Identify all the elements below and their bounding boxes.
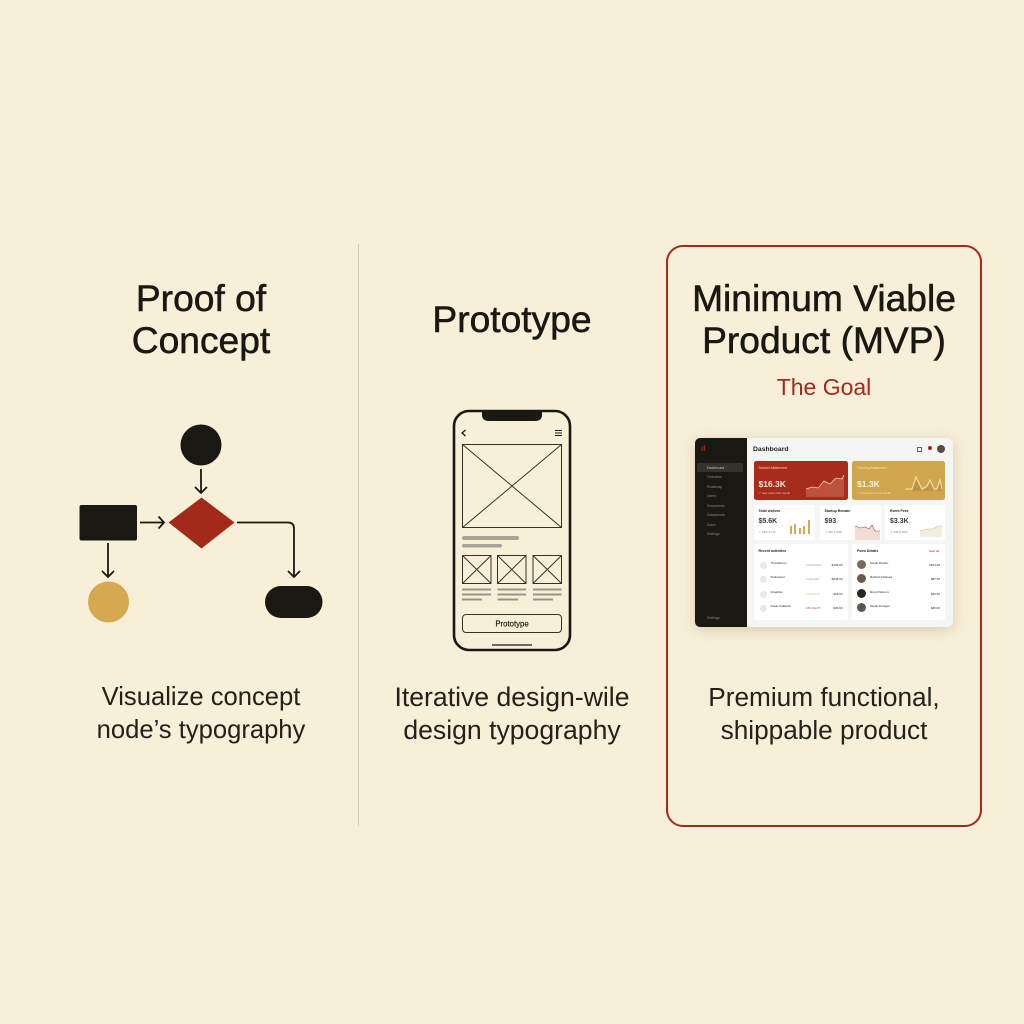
- heading: Prototype: Prototype: [432, 298, 592, 340]
- table: recent activity: Great Indiiana: [770, 604, 791, 608]
- phone button label: Prototype: [495, 620, 529, 628]
- heading: Proof of Concept: Proof of: [136, 277, 266, 319]
- notification dot: [928, 446, 932, 450]
- table: people: Brent Nelson: [870, 590, 889, 594]
- sidebar: Datasheets: [707, 513, 725, 517]
- description: proof of concept: node’s typography: [97, 716, 305, 744]
- gold KPI card: ↗ investments this month: [857, 491, 891, 495]
- table: recent activity: $246.00: [832, 577, 842, 581]
- stat card: event fees: $3.3K: [890, 518, 909, 525]
- dashboard title: Dashboard: [753, 446, 789, 453]
- stat card: total visitors: Total visitors: [758, 509, 780, 513]
- sidebar: Overview: [707, 475, 722, 479]
- table: recent activity: Graphite: [770, 590, 783, 594]
- red KPI card: ↗ new users this month: [758, 491, 790, 495]
- heading: Minimum Viable Product: Product (MVP): [702, 319, 946, 361]
- table: people: View all: [929, 549, 939, 553]
- sidebar: Documents: [707, 504, 725, 508]
- table: people: Sarah Hodges: [870, 604, 890, 608]
- description: prototype: Iterative design-wile: [394, 682, 630, 712]
- sidebar: Settings: [707, 532, 720, 536]
- table: recent activity: $105.00: [832, 563, 842, 567]
- table: recent activity: ▪ PAYOUT: [806, 592, 819, 596]
- stat card: total visitors: [754, 505, 814, 540]
- gold KPI card: Funding Attainment: [857, 466, 887, 470]
- heading: Minimum Viable Product: [692, 277, 956, 361]
- table: recent activity: ▪ DEALED: [806, 577, 819, 581]
- description: MVP: Premium functional,: [708, 682, 940, 712]
- heading: Proof of Concept: [132, 277, 270, 361]
- table: people: Rachel Chelsea: [870, 575, 892, 579]
- dashboard screenshot: [695, 438, 953, 627]
- description: prototype: design typography: [403, 715, 621, 745]
- table: recent activity: Podcaster: [770, 575, 785, 579]
- table: recent activity: ▪ FINISHED: [806, 563, 821, 567]
- subheading: The Goal: The Goal: [777, 374, 871, 400]
- stat card: startup revenue: $93: [824, 518, 836, 525]
- description: MVP: [708, 682, 940, 745]
- table: recent activity: ▪ BOUGHT: [806, 606, 820, 610]
- heading: Proof of Concept: Concept: [132, 319, 270, 361]
- table: recent activity: $18.00: [833, 592, 842, 596]
- sidebar: Dashboard: [707, 466, 724, 470]
- red KPI card: Search Attainment: [758, 466, 787, 470]
- red KPI card: [754, 461, 848, 500]
- description: proof of concept: [97, 683, 306, 744]
- stat card: event fees: ↗ 445 3.20%: [890, 530, 908, 534]
- table: recent activity: Recent activities: [758, 549, 786, 553]
- description: proof of concept: Visualize concept: [102, 683, 300, 711]
- stat card: startup revenue: ↗ 445 3.20%: [824, 530, 842, 534]
- table: people: [852, 544, 945, 620]
- bookmark icon: [917, 447, 922, 452]
- table: recent activity: [754, 544, 848, 620]
- table: people: $324.00: [929, 563, 940, 567]
- sidebar: Roadmap: [707, 485, 722, 489]
- divider between columns: [358, 244, 359, 826]
- gold KPI card: [852, 461, 945, 500]
- description: prototype: [394, 682, 630, 745]
- sidebar: Users: [707, 494, 716, 498]
- gold KPI card: $1.3K: [857, 479, 880, 489]
- description: MVP: shippable product: [721, 715, 927, 745]
- table: people: $35.00: [931, 592, 940, 596]
- stat card: total visitors: ↗ 18% 3.2%: [758, 530, 776, 534]
- stat card: startup revenue: [820, 505, 880, 540]
- table: people: $35.00: [931, 606, 940, 610]
- table: recent activity: $23.00: [833, 606, 842, 610]
- heading: Minimum Viable Product: Minimum Viable: [692, 277, 956, 319]
- table: people: Sarah Parker: [870, 561, 889, 565]
- sidebar: [695, 438, 747, 627]
- sidebar: Sales: [707, 523, 716, 527]
- panel: MVP highlight border: [666, 244, 982, 827]
- stat card: event fees: Event Fees: [890, 509, 908, 513]
- stat card: event fees: [885, 505, 945, 540]
- stat card: startup revenue: Startup Remain: [824, 509, 850, 513]
- table: people: $87.50: [931, 577, 940, 581]
- stat card: total visitors: $5.6K: [758, 518, 777, 525]
- table: recent activity: Transitions: [770, 561, 787, 565]
- table: people: Point Details: [857, 549, 878, 553]
- sidebar: Settings: [707, 616, 720, 620]
- red KPI card: $16.3K: [758, 479, 786, 489]
- sidebar: ıl: [701, 444, 705, 453]
- avatar: [937, 445, 945, 453]
